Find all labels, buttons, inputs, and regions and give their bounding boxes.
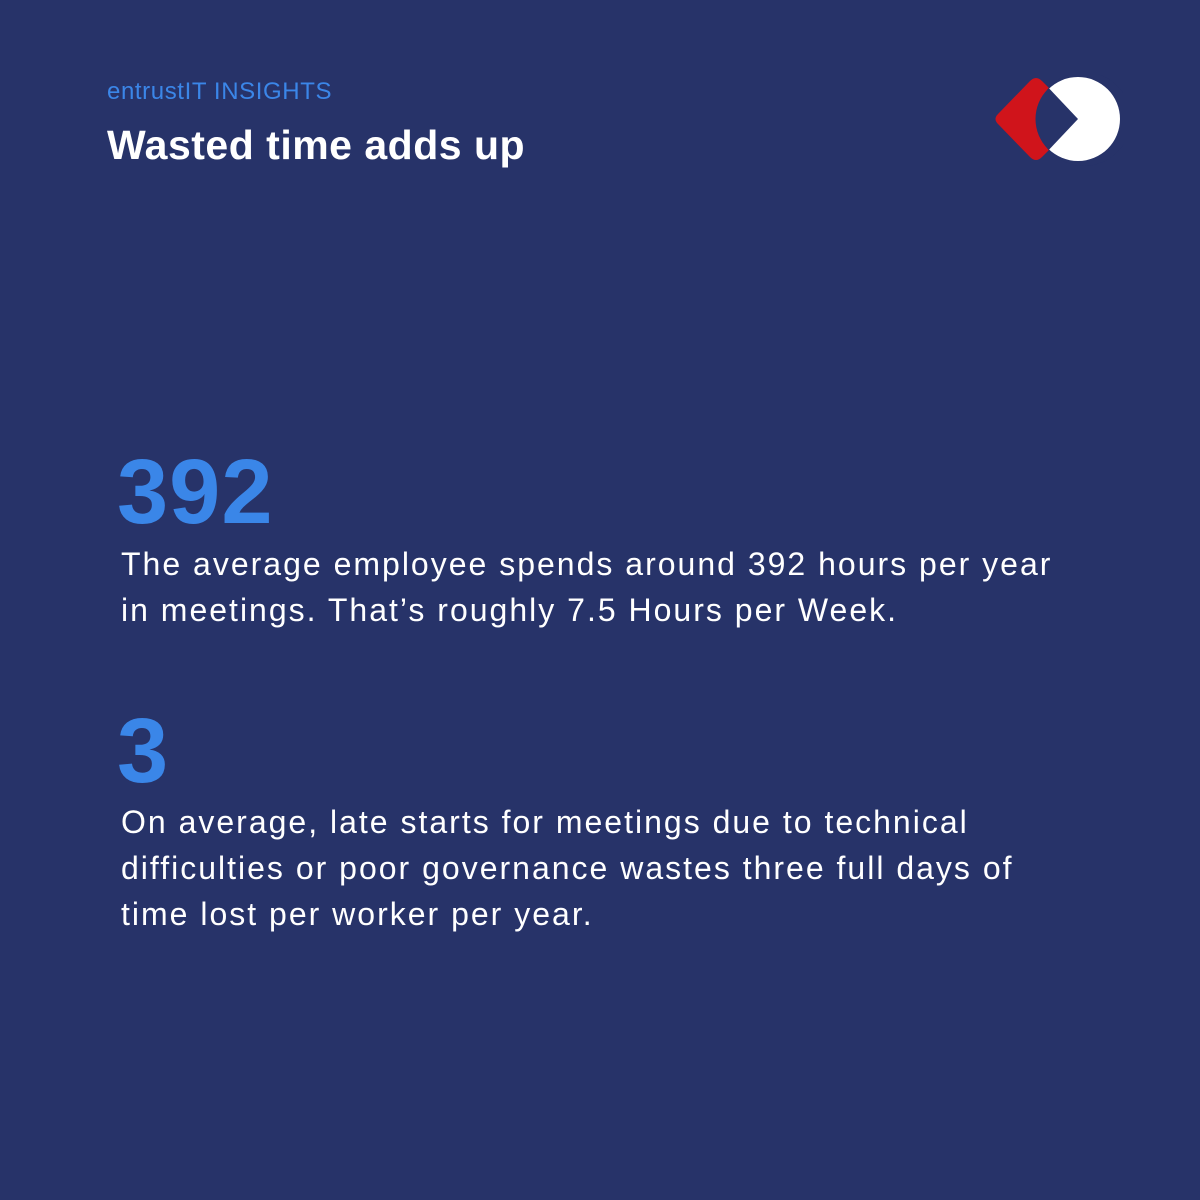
kicker: entrustIT INSIGHTS: [107, 78, 332, 105]
stat: 3: 3: [117, 700, 169, 802]
text: 3 description: time lost per worker per year.: [121, 896, 594, 932]
text: 3 description: On average, late starts for meetings due to technical: [121, 804, 969, 840]
text: 392 description: The average employee spends around 392 hours per year: [121, 546, 1052, 582]
title: Wasted time adds up: [107, 122, 525, 168]
stat: 392: 392: [117, 441, 274, 543]
text: 392 description: [121, 546, 1052, 628]
icon: logo: [996, 77, 1120, 161]
text: 3 description: difficulties or poor governance wastes three full days of: [121, 850, 1014, 886]
text: 3 description: [121, 804, 1014, 932]
text: 392 description: in meetings. That’s roughly 7.5 Hours per Week.: [121, 592, 898, 628]
